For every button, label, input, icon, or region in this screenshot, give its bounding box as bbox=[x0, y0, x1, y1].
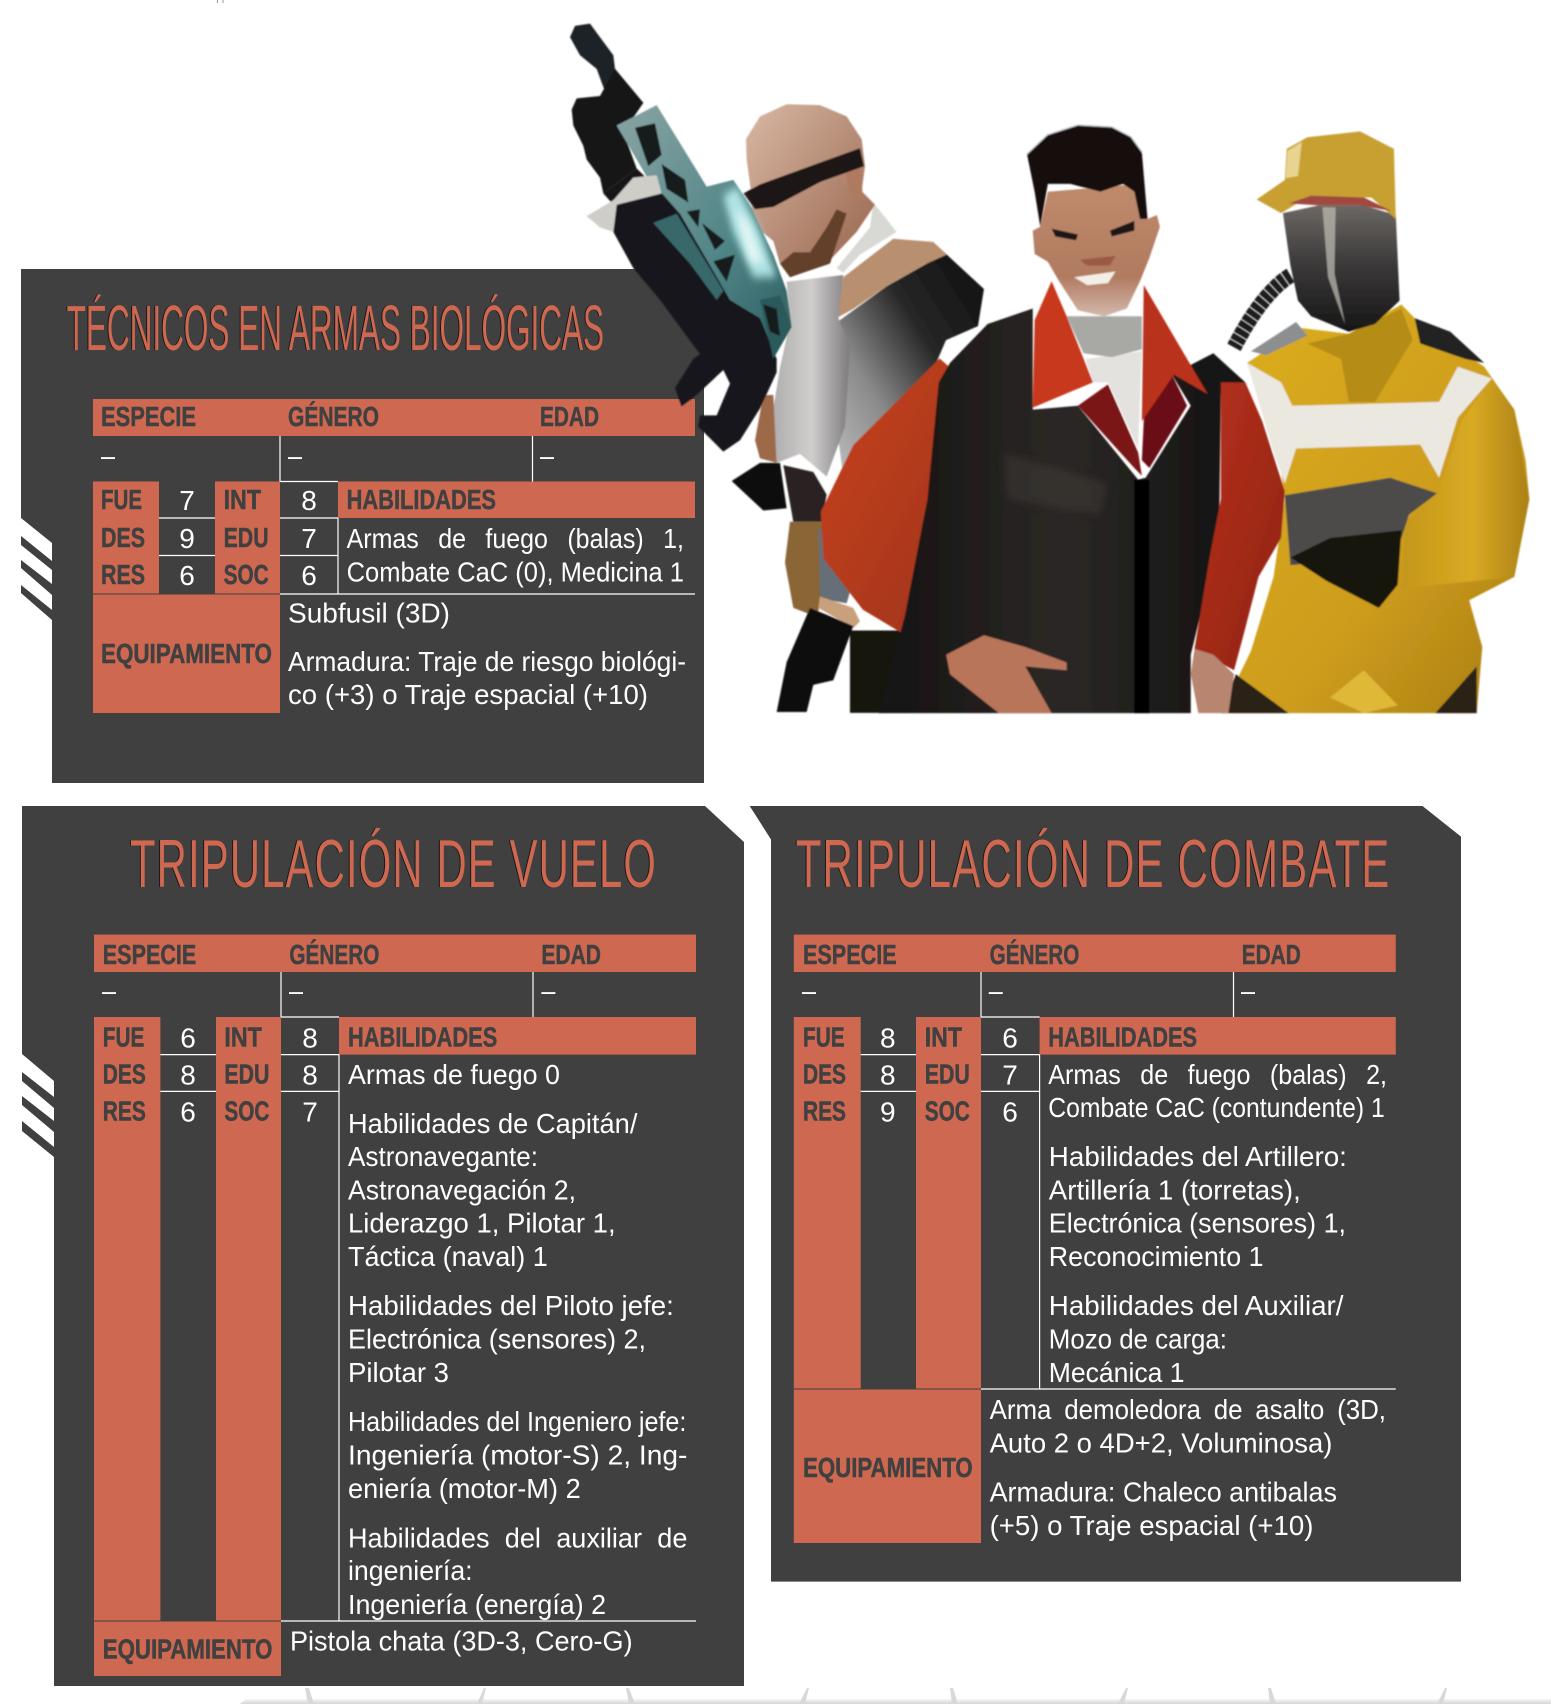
panel: técnicos en armas biológicas: TÉCNICOS EN ARMAS BIOLÓGICAS bbox=[67, 292, 604, 364]
table: combate: RES bbox=[803, 1096, 846, 1127]
table: vuelo: eniería (motor-M) 2 bbox=[348, 1473, 581, 1504]
table: vuelo: Pilotar 3 bbox=[348, 1357, 449, 1388]
table: vuelo: SOC bbox=[224, 1096, 270, 1127]
table: vuelo: – bbox=[541, 975, 556, 1006]
table: técnicos: Combate CaC (0), Medicina 1 bbox=[347, 556, 684, 588]
table: técnicos: FUE bbox=[101, 484, 142, 515]
table: técnicos: ESPECIE bbox=[101, 401, 196, 432]
table: vuelo: HABILIDADES bbox=[348, 1022, 497, 1053]
table: combate: Mozo de carga: bbox=[1049, 1324, 1227, 1355]
table: técnicos: 8 bbox=[301, 485, 317, 516]
table: vuelo: GÉNERO bbox=[289, 939, 379, 970]
table: combate: GÉNERO bbox=[990, 939, 1079, 970]
panel: tripulación de vuelo bbox=[22, 806, 744, 1686]
table: técnicos: EDU bbox=[224, 522, 269, 553]
table: combate: EDAD bbox=[1242, 939, 1301, 970]
table: combate: 8 bbox=[880, 1023, 896, 1054]
table: vuelo: 7 bbox=[302, 1097, 318, 1128]
table: vuelo: EDAD bbox=[541, 939, 601, 970]
table: combate: EQUIPAMIENTO bbox=[803, 1452, 973, 1483]
illustration: three crew members with rifle bbox=[570, 24, 1529, 713]
table: combate: HABILIDADES bbox=[1048, 1022, 1197, 1053]
table: vuelo: ingeniería: bbox=[348, 1555, 473, 1586]
table: vuelo: Electrónica (sensores) 2, bbox=[348, 1324, 646, 1355]
table: técnicos: Armas de fuego (balas) 1, bbox=[347, 523, 684, 554]
footer: faded grey band with spikes bbox=[240, 1688, 1551, 1704]
table: técnicos: 6 bbox=[179, 560, 195, 591]
table: vuelo: Habilidades del Ingeniero jefe: bbox=[348, 1406, 686, 1437]
panel: técnicos en armas biológicas bbox=[21, 269, 704, 783]
table: combate: Habilidades del Auxiliar/ bbox=[1049, 1290, 1344, 1321]
table: vuelo: Ingeniería (energía) 2 bbox=[348, 1589, 606, 1620]
table: técnicos: – bbox=[101, 440, 115, 471]
title: vuelo: TRIPULACIÓN DE VUELO bbox=[130, 826, 657, 902]
table: vuelo: DES bbox=[103, 1058, 146, 1089]
table: combate: Reconocimiento 1 bbox=[1049, 1241, 1264, 1272]
table: técnicos: EDAD bbox=[540, 401, 599, 432]
table: combate: Habilidades del Artillero: bbox=[1049, 1141, 1347, 1172]
table: vuelo: INT bbox=[224, 1022, 262, 1053]
table: combate: Combate CaC (contundente) 1 bbox=[1048, 1092, 1385, 1123]
table: combate: 8 bbox=[880, 1059, 896, 1090]
table: combate: 7 bbox=[1002, 1059, 1018, 1090]
table: vuelo: EDU bbox=[224, 1058, 269, 1089]
table: técnicos: DES bbox=[101, 522, 145, 553]
table: técnicos: RES bbox=[101, 559, 145, 590]
table: combate: Electrónica (sensores) 1, bbox=[1049, 1208, 1346, 1239]
table: combate: – bbox=[1241, 975, 1255, 1006]
table: técnicos: 9 bbox=[179, 523, 195, 554]
table: combate: Auto 2 o 4D+2, Voluminosa) bbox=[990, 1427, 1332, 1458]
table: técnicos: Subfusil (3D) bbox=[288, 598, 450, 628]
table: combate: Mecánica 1 bbox=[1049, 1357, 1184, 1388]
table: vuelo: ESPECIE bbox=[103, 939, 196, 970]
figure: pilot in red jacket bbox=[879, 126, 1285, 713]
table: vuelo: Táctica (naval) 1 bbox=[348, 1241, 548, 1272]
table: vuelo: Habilidades del Piloto jefe: bbox=[348, 1290, 674, 1321]
table: vuelo: Habilidades de Capitán/ bbox=[348, 1108, 638, 1139]
figure: technician with sunglasses and rifle bbox=[570, 24, 993, 713]
table: vuelo: 8 bbox=[302, 1023, 318, 1054]
table: técnicos: EQUIPAMIENTO bbox=[101, 638, 272, 669]
table: técnicos: HABILIDADES bbox=[347, 484, 496, 515]
table: combate: 6 bbox=[1002, 1097, 1018, 1128]
table: vuelo: RES bbox=[103, 1096, 146, 1127]
table: combate: Armas de fuego (balas) 2, bbox=[1048, 1059, 1387, 1090]
table: combate: SOC bbox=[925, 1096, 970, 1127]
table: vuelo: 6 bbox=[180, 1023, 196, 1054]
table: vuelo: Astronavegante: bbox=[348, 1141, 538, 1172]
table: vuelo: Pistola chata (3D-3, Cero-G) bbox=[290, 1626, 633, 1656]
table: técnicos: – bbox=[540, 440, 554, 471]
marks: small top crop ticks bbox=[218, 0, 223, 3]
table: técnicos: 7 bbox=[301, 523, 317, 554]
table: técnicos: co (+3) o Traje espacial (+10) bbox=[288, 679, 648, 710]
table: técnicos: SOC bbox=[224, 559, 269, 590]
table: vuelo: 8 bbox=[302, 1059, 318, 1090]
table: técnicos bbox=[93, 399, 695, 713]
table: vuelo: Astronavegación 2, bbox=[348, 1174, 576, 1205]
table: combate: (+5) o Traje espacial (+10) bbox=[990, 1510, 1313, 1541]
table: combate: INT bbox=[925, 1022, 962, 1053]
table: vuelo: Ingeniería (motor-S) 2, Ing- bbox=[348, 1440, 687, 1471]
table: combate: – bbox=[802, 975, 816, 1006]
table: combate: Artillería 1 (torretas), bbox=[1049, 1174, 1301, 1205]
table: vuelo: EQUIPAMIENTO bbox=[103, 1634, 272, 1665]
figure: crew member in yellow suit and mask bbox=[1221, 131, 1529, 713]
table: combate: ESPECIE bbox=[803, 939, 897, 970]
table: combate: – bbox=[989, 975, 1003, 1006]
table: combate: 9 bbox=[880, 1097, 896, 1128]
table: vuelo: Armas de fuego 0 bbox=[348, 1059, 560, 1090]
table: técnicos: 7 bbox=[179, 485, 195, 516]
table: combate: 6 bbox=[1002, 1023, 1018, 1054]
table: vuelo: 8 bbox=[180, 1059, 196, 1090]
table: combate: DES bbox=[803, 1058, 846, 1089]
table: vuelo: FUE bbox=[103, 1022, 144, 1053]
table: vuelo: Habilidades del auxiliar de bbox=[348, 1522, 687, 1553]
table: combate: EDU bbox=[925, 1058, 970, 1089]
table: vuelo bbox=[94, 935, 696, 1676]
table: técnicos: – bbox=[288, 440, 302, 471]
table: técnicos: GÉNERO bbox=[288, 401, 379, 432]
table: técnicos: Armadura: Traje de riesgo biológi- bbox=[288, 646, 686, 677]
table: técnicos: INT bbox=[224, 484, 261, 515]
table: combate: Arma demoledora de asalto (3D, bbox=[990, 1394, 1386, 1425]
table: vuelo: 6 bbox=[180, 1097, 196, 1128]
table: combate bbox=[794, 935, 1396, 1543]
table: vuelo: Liderazgo 1, Pilotar 1, bbox=[348, 1208, 616, 1239]
table: vuelo: – bbox=[289, 975, 303, 1006]
panel: tripulación de combate bbox=[750, 806, 1461, 1582]
figure: pilot left sleeve bbox=[821, 358, 984, 661]
table: vuelo: – bbox=[102, 975, 116, 1006]
table: combate: Armadura: Chaleco antibalas bbox=[990, 1476, 1337, 1507]
table: combate: FUE bbox=[803, 1022, 845, 1053]
table: técnicos: 6 bbox=[301, 560, 317, 591]
